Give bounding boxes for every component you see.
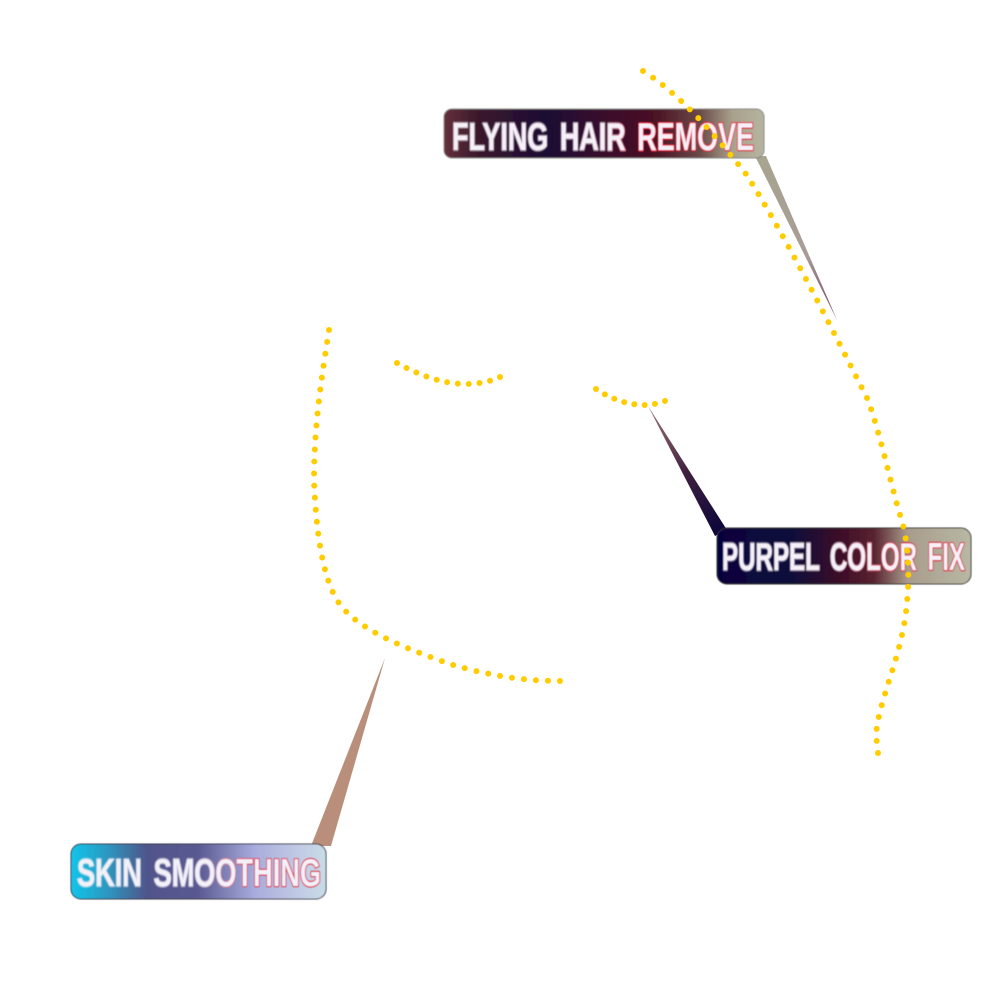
pointer: skin smoothing bbox=[311, 658, 385, 846]
dotted line: face outline left bbox=[314, 330, 560, 681]
dotted line: right eye bbox=[596, 389, 665, 405]
pointer: flying hair remove bbox=[755, 156, 837, 320]
label: skin smoothing bbox=[71, 844, 326, 899]
label: flying hair remove bbox=[444, 109, 764, 159]
label: flying hair remove: FLYING HAIR REMOVE bbox=[452, 116, 754, 159]
pointer: purple color fix bbox=[648, 406, 727, 536]
label: purpel color fix bbox=[717, 528, 971, 584]
dotted line: left eye bbox=[397, 363, 500, 384]
dotted line: hair outline right bbox=[643, 71, 908, 753]
label: skin smoothing: SKIN SMOOTHING bbox=[77, 852, 321, 895]
